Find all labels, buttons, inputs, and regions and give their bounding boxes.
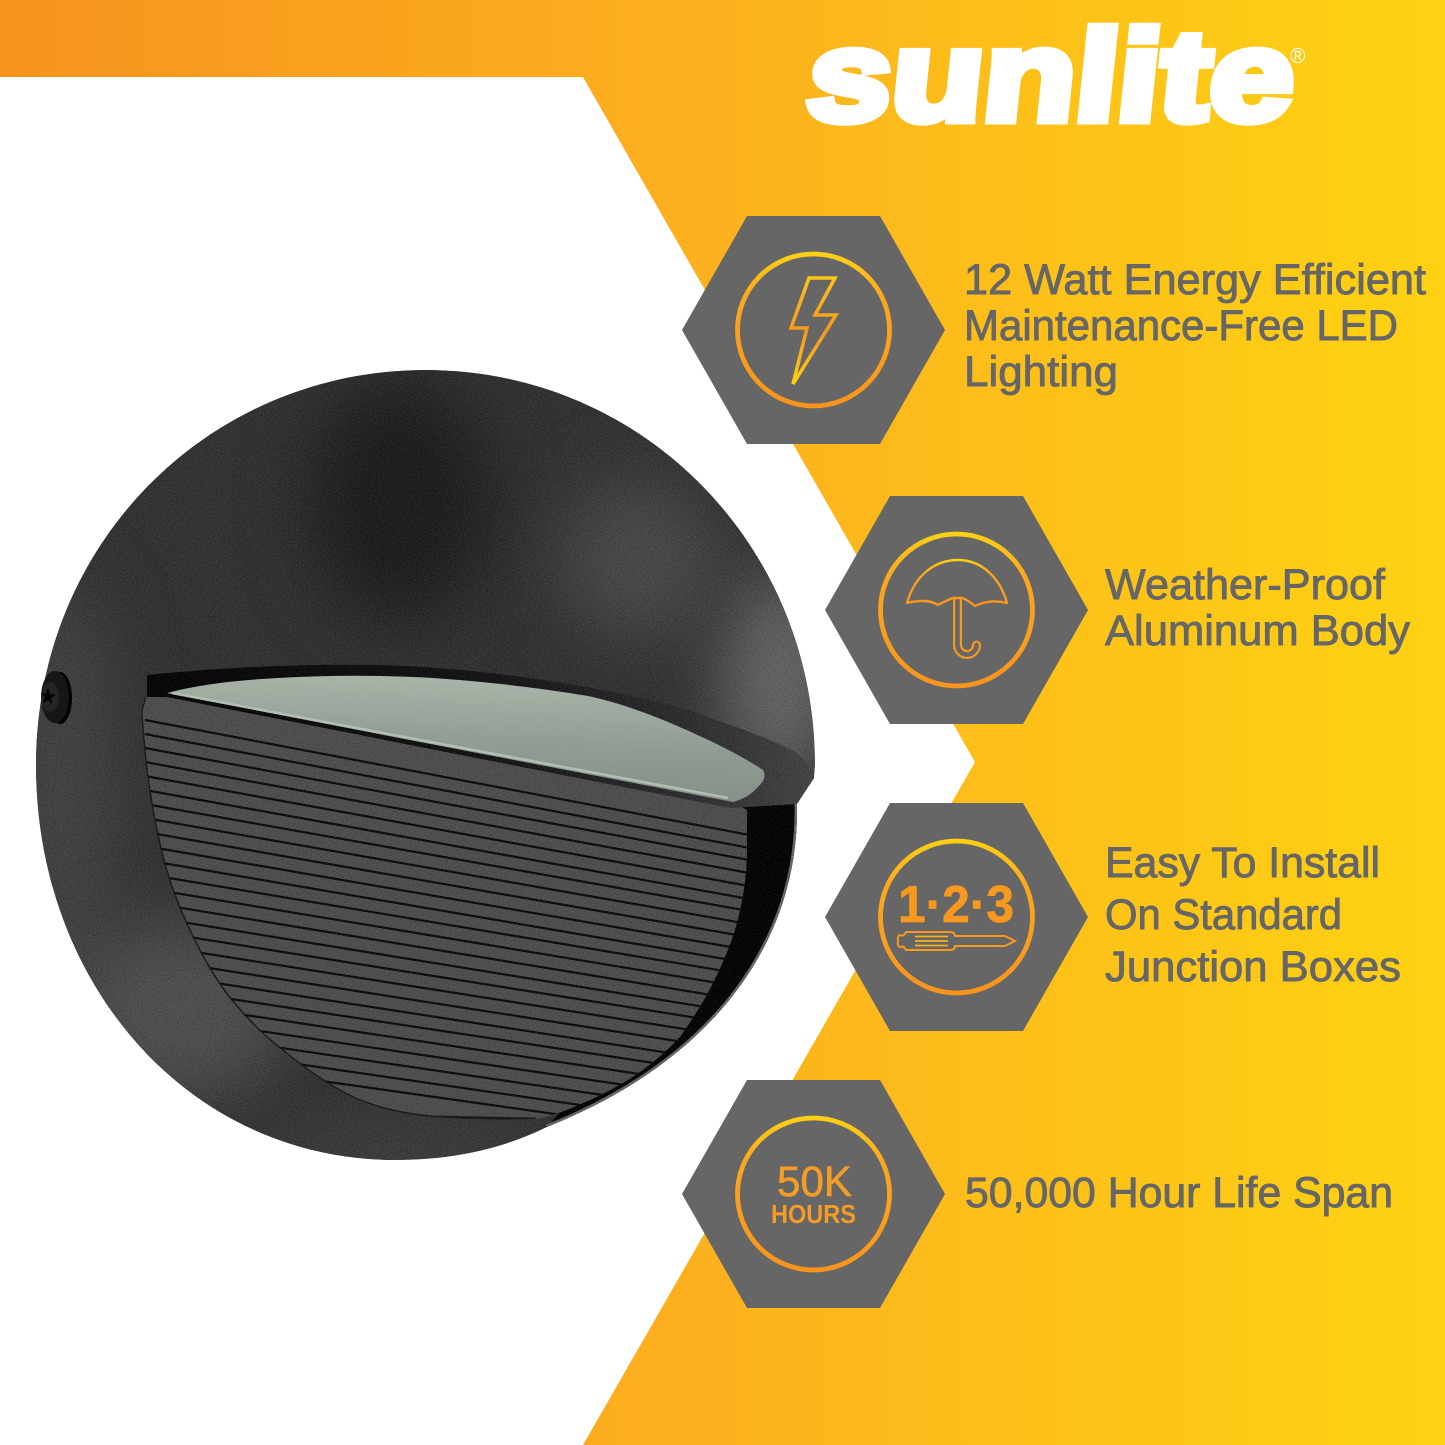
text: weather-proof: Aluminum Body — [1105, 607, 1410, 655]
text: easy install — [1105, 839, 1401, 991]
text: weather-proof — [1105, 561, 1410, 655]
logo: sunlite: ® — [1290, 45, 1306, 68]
light lip above the lens — [147, 665, 814, 808]
text: energy efficient — [964, 256, 1426, 396]
hexagon badge with bolt icon — [682, 216, 945, 444]
text: energy efficient: Maintenance-Free LED — [964, 302, 1398, 350]
black inner housing — [547, 800, 800, 1127]
outer skin edge — [547, 804, 797, 1127]
product photo: round black LED wall light — [0, 370, 840, 1175]
text: easy install: Junction Boxes — [1105, 943, 1401, 991]
hexagon badge with umbrella icon — [825, 496, 1088, 724]
mounting screw — [41, 671, 72, 724]
hexagon badge with 1-2-3 and screwdriver icon — [825, 803, 1088, 1031]
logo: sunlite: sunlite — [801, 5, 1302, 148]
hexagon badge with 1-2-3 and screwdriver icon: 1·2·3 — [898, 876, 1014, 934]
text: easy install: On Standard — [1105, 891, 1342, 939]
text: weather-proof: Weather-Proof — [1105, 561, 1386, 609]
hexagon badge with 50K hours icon — [682, 1080, 945, 1308]
text: life span: 50,000 Hour Life Span — [965, 1169, 1393, 1217]
text: energy efficient: Lighting — [964, 348, 1118, 396]
feature 3: easy install — [825, 803, 1401, 1031]
white chevron panel — [0, 77, 975, 1445]
text: easy install: Easy To Install — [1105, 839, 1380, 887]
ribbed louver grille — [141, 696, 747, 1120]
feature 1: energy efficient — [682, 216, 1426, 444]
hexagon badge with 50K hours icon: 50K — [777, 1158, 852, 1206]
text: energy efficient: 12 Watt Energy Efficient — [964, 256, 1426, 304]
frosted LED lens — [167, 676, 765, 802]
feature 4: life span — [682, 1080, 1393, 1308]
feature 2: weather-proof — [825, 496, 1410, 724]
hexagon badge with 50K hours icon: HOURS — [771, 1199, 856, 1229]
